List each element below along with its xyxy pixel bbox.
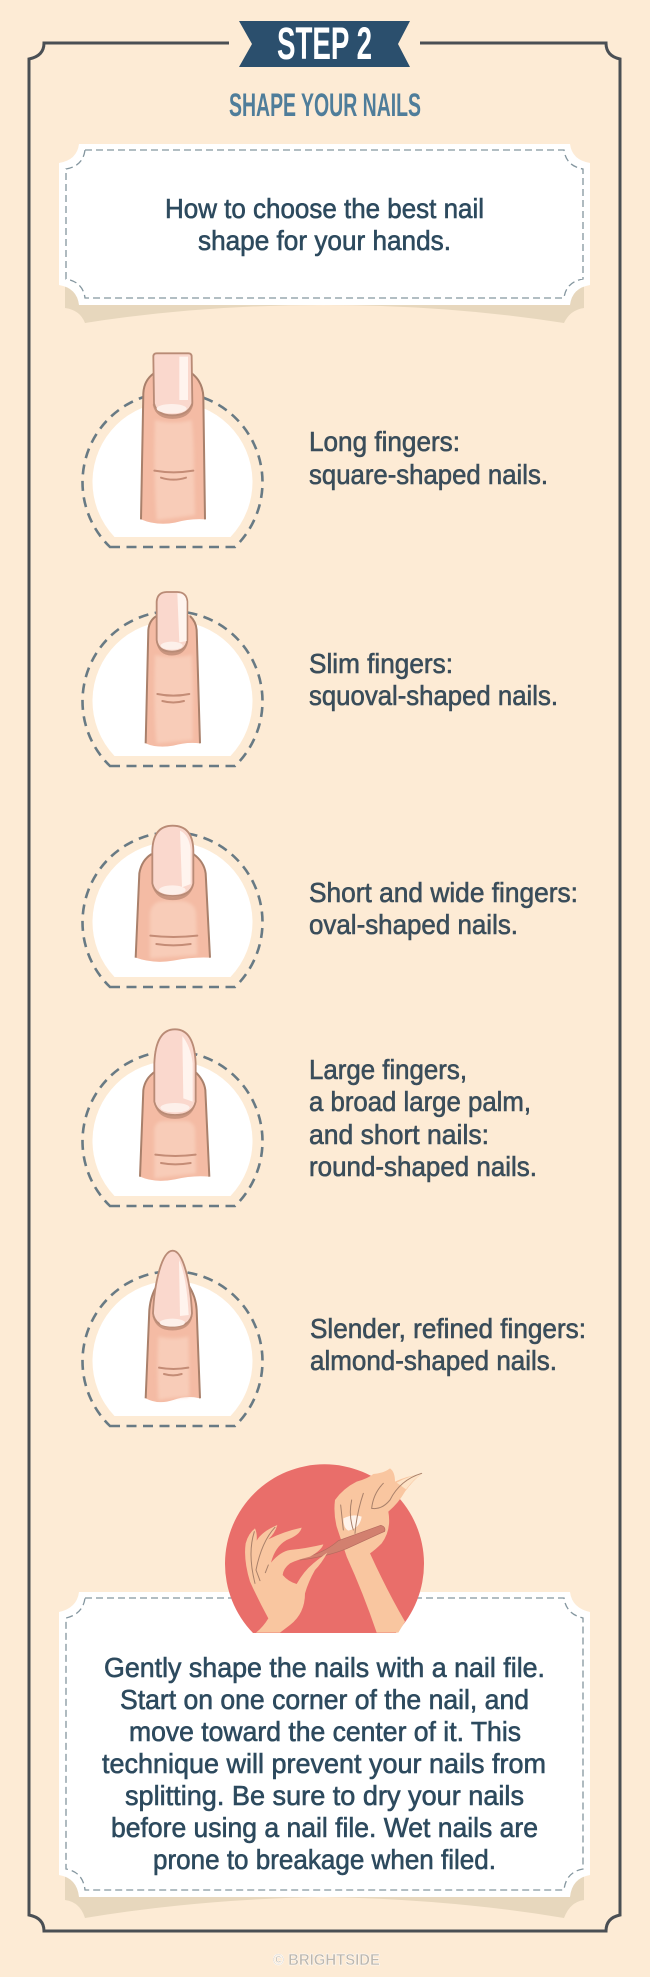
label: slim fingers xyxy=(309,648,558,711)
panel: filing advice xyxy=(59,1592,590,1918)
label: short and wide fingers: oval-shaped nails. xyxy=(309,909,518,940)
icon: square nail finger xyxy=(82,353,262,547)
intro text: shape for your hands. xyxy=(198,225,451,256)
illustration: hands filing nails xyxy=(225,1464,424,1633)
intro text: How to choose the best nail xyxy=(165,193,484,224)
icon: squoval nail finger xyxy=(82,592,262,766)
label: slender fingers: Slender, refined fingers: xyxy=(310,1313,586,1344)
nail file xyxy=(300,1525,385,1560)
intro text xyxy=(165,193,484,256)
icon: oval nail finger xyxy=(82,826,262,987)
label: large fingers: a broad large palm, xyxy=(309,1086,531,1117)
label: long fingers: square-shaped nails. xyxy=(309,459,548,490)
label: long fingers: Long fingers: xyxy=(309,426,460,457)
banner: step 2: STEP 2 xyxy=(277,18,372,69)
label: large fingers: round-shaped nails. xyxy=(309,1151,537,1182)
panel stitching xyxy=(66,150,583,298)
banner: step 2 xyxy=(239,18,410,69)
icon: round nail finger xyxy=(82,1029,262,1206)
heading: shape your nails: SHAPE YOUR NAILS xyxy=(229,87,421,123)
label: slender fingers: almond-shaped nails. xyxy=(310,1345,557,1376)
left hand xyxy=(245,1525,327,1633)
label: slender fingers xyxy=(310,1313,586,1376)
label: short and wide fingers: Short and wide fingers: xyxy=(309,877,578,908)
watermark: © BRIGHTSIDE xyxy=(273,1952,380,1969)
advice text: splitting. Be sure to dry your nails xyxy=(125,1780,524,1811)
advice text: move toward the center of it. This xyxy=(129,1716,521,1747)
label: large fingers: and short nails: xyxy=(309,1119,489,1150)
advice text xyxy=(102,1652,546,1875)
panel body xyxy=(59,144,590,305)
panel stitching xyxy=(66,1598,583,1890)
panel shadow xyxy=(65,1875,584,1918)
advice text: technique will prevent your nails from xyxy=(102,1748,546,1779)
icon: almond nail finger xyxy=(82,1251,262,1426)
label: long fingers xyxy=(309,426,548,490)
panel: intro xyxy=(59,144,590,323)
right hand xyxy=(334,1468,422,1633)
panel body xyxy=(59,1592,590,1897)
advice text: Start on one corner of the nail, and xyxy=(120,1684,529,1715)
red circle xyxy=(225,1464,424,1633)
panel shadow xyxy=(65,285,584,323)
label: slim fingers: squoval-shaped nails. xyxy=(309,680,558,711)
label: slim fingers: Slim fingers: xyxy=(309,648,453,679)
advice text: Gently shape the nails with a nail file. xyxy=(104,1652,545,1683)
advice text: prone to breakage when filed. xyxy=(153,1844,496,1875)
advice text: before using a nail file. Wet nails are xyxy=(111,1812,538,1843)
label: short and wide fingers xyxy=(309,877,578,940)
label: large fingers: Large fingers, xyxy=(309,1054,467,1085)
label: large fingers xyxy=(309,1054,537,1182)
